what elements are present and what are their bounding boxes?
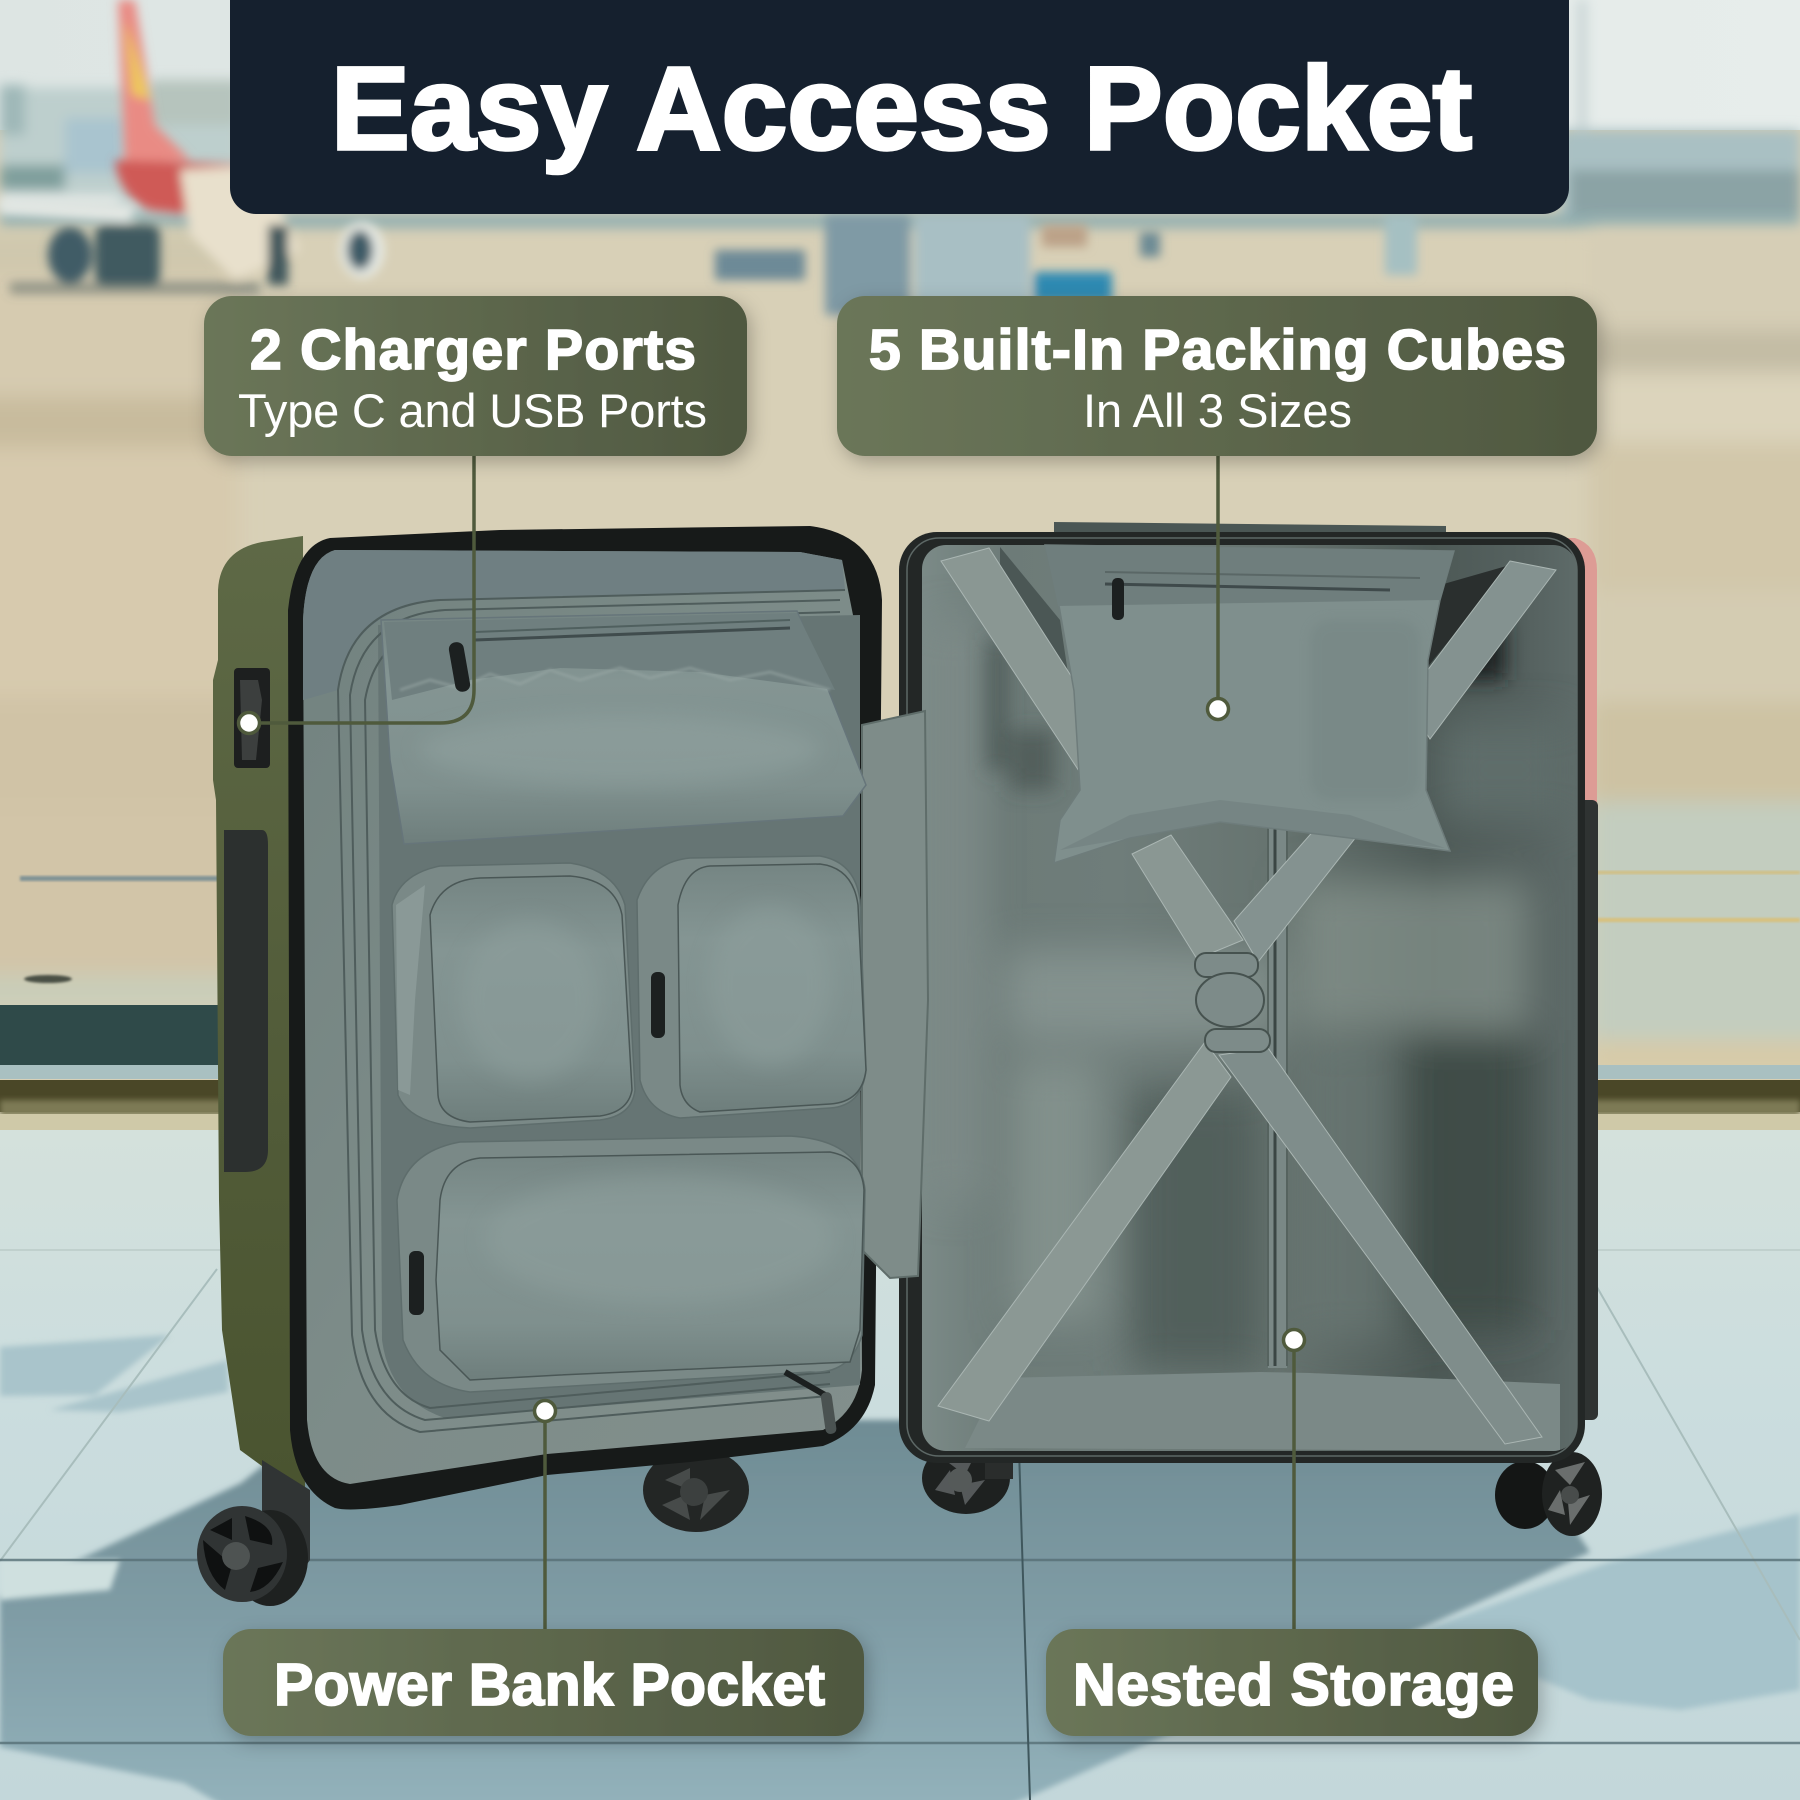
lining zipper seam [338,590,845,1432]
marker dot: nested storage [1284,1330,1304,1350]
bottom zip pull [785,1372,837,1435]
left front wheel [197,1460,310,1606]
right suitcase right wheel [1495,1452,1602,1536]
title banner [230,0,1569,214]
lining inner panel [378,615,860,1418]
lining upper panel [303,550,845,700]
cross straps [938,548,1556,1444]
left suitcase olive shell [213,536,305,1490]
runway vehicles [715,215,1417,315]
charger port lock [234,668,270,768]
large top packing cube [381,611,866,844]
callout label: Nested Storage [1073,1652,1514,1718]
callout subtext: Type C and USB Ports [238,384,707,437]
divider flap [862,711,928,1278]
runway aircraft [0,0,384,294]
marker dot: charger ports [238,712,260,734]
top right packing cube pillow [1045,545,1454,863]
marker dot: packing cubes [1208,698,1228,720]
right suitcase left wheel [922,1442,1013,1514]
right suitcase shell edge [1549,538,1598,1420]
leader line: nested storage [1292,1340,1296,1629]
callout: power bank pocket [223,1629,864,1736]
right suitcase: open lid with straps [899,522,1602,1536]
leader line: charger ports [250,456,474,723]
callout label: Power Bank Pocket [274,1652,825,1718]
leader line: power bank [543,1411,547,1629]
small packing cube right [637,856,866,1118]
left suitcase lining [303,550,862,1484]
right suitcase lining [922,545,1577,1451]
left tarmac bands [0,232,240,272]
floor sun shadows [0,1335,1800,1800]
title text: Easy Access Pocket [331,43,1472,175]
large bottom packing cube [397,1136,865,1392]
strap buckle [1195,953,1270,1052]
right tarmac bands [1590,230,1800,330]
side carry handle [224,830,268,1172]
callout heading: 5 Built-In Packing Cubes [869,318,1566,382]
center zipper [1268,828,1287,1368]
right suitcase handle [1054,522,1446,536]
callout subtext: In All 3 Sizes [1083,384,1352,437]
callout: 2 charger ports [204,296,747,456]
left suitcase frame rim [288,526,882,1509]
marker dot: power bank [534,1400,556,1422]
callout: 5 built-in packing cubes [837,296,1597,456]
floor tile joints [0,1250,1800,1800]
left rear wheel [643,1448,749,1532]
small packing cube left [392,863,635,1128]
left suitcase: open lid with organiser pouches [197,526,928,1606]
callout: nested storage [1046,1629,1538,1736]
bottom lining panel [965,1372,1560,1451]
callout heading: 2 Charger Ports [250,318,696,382]
right suitcase frame rim [899,532,1585,1463]
leader line: packing cubes [1216,456,1220,709]
